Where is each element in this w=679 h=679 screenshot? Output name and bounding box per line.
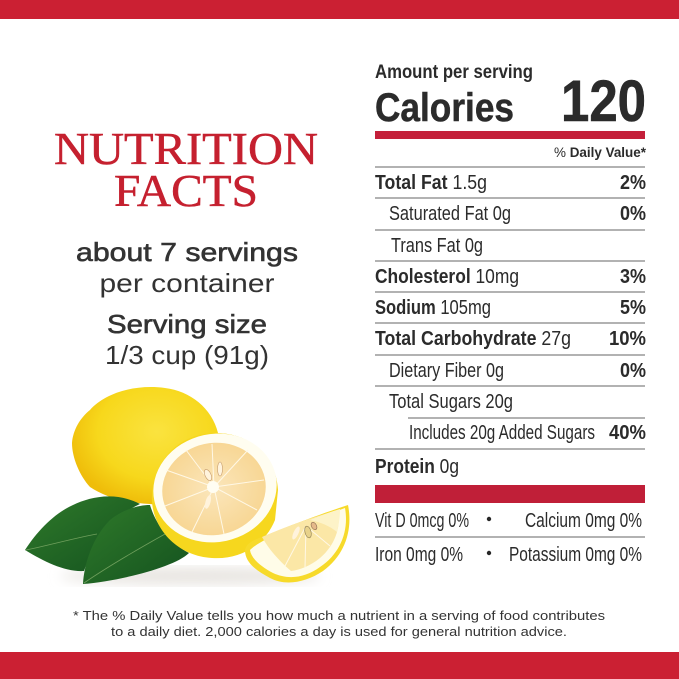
total fat: 2% <box>620 172 646 194</box>
saturated fat: 0% <box>620 203 646 225</box>
leaf front <box>83 505 189 584</box>
total sugars: Total Sugars 20g <box>389 391 513 413</box>
half lemon segments <box>165 444 264 534</box>
footnote: to a daily diet. 2,000 calories a day is used for general nutrition advice. <box>111 624 567 639</box>
top red band <box>0 0 679 19</box>
sodium: Sodium 105mg <box>375 297 491 319</box>
serving size text: Serving size <box>107 309 267 339</box>
saturated fat: Saturated Fat 0g <box>389 203 511 225</box>
half lemon rind <box>152 433 278 558</box>
leaf back <box>25 496 140 571</box>
whole lemon <box>72 387 218 505</box>
amount per serving: Amount per serving <box>375 62 533 83</box>
total fat <box>375 172 646 194</box>
sodium <box>375 297 646 319</box>
vitamin row 1 <box>375 510 642 532</box>
cholesterol: Cholesterol 10mg <box>375 266 519 288</box>
total carbohydrate: Total Carbohydrate 27g <box>375 328 571 350</box>
serving size text: 1/3 cup (91g) <box>105 340 269 370</box>
saturated fat <box>389 203 646 225</box>
lemon wedge <box>245 505 349 582</box>
dietary fiber: Dietary Fiber 0g <box>389 360 504 382</box>
dietary fiber <box>389 360 646 382</box>
dietary fiber: 0% <box>620 360 646 382</box>
title <box>54 123 318 216</box>
vitamin row 2 <box>375 544 642 566</box>
title: FACTS <box>114 165 258 216</box>
bottom red band <box>0 652 679 679</box>
half lemon flesh <box>154 433 274 545</box>
half lemon pith <box>143 422 287 554</box>
added sugars: Includes 20g Added Sugars <box>409 422 595 444</box>
vitamin row 1: Calcium 0mg 0% <box>525 510 642 532</box>
total fat: Total Fat 1.5g <box>375 172 487 194</box>
protein: Protein 0g <box>375 456 459 478</box>
servings text <box>76 237 298 298</box>
trans fat: Trans Fat 0g <box>391 235 483 257</box>
servings text: per container <box>100 268 275 298</box>
sodium: 5% <box>620 297 646 319</box>
footnote: * The % Daily Value tells you how much a nutrient in a serving of food contributes <box>73 608 606 623</box>
added sugars: 40% <box>609 422 646 444</box>
calories value: 120 <box>561 69 646 134</box>
daily value header: % Daily Value* <box>554 144 647 160</box>
title: NUTRITION <box>54 123 318 174</box>
cholesterol <box>375 266 646 288</box>
footnote <box>73 608 606 639</box>
calories label: Calories <box>375 86 514 130</box>
cholesterol: 3% <box>620 266 646 288</box>
total carbohydrate: 10% <box>609 328 646 350</box>
vitamin row 2: Potassium 0mg 0% <box>509 544 642 566</box>
lemon illustration <box>25 387 349 585</box>
vitamin row 1: Vit D 0mcg 0% <box>375 510 469 532</box>
servings text: about 7 servings <box>76 237 298 267</box>
serving size text <box>105 309 269 370</box>
nutrition table <box>375 62 647 566</box>
red bar <box>375 485 645 503</box>
red rule <box>375 131 645 139</box>
vitamin row 2: Iron 0mg 0% <box>375 544 463 566</box>
